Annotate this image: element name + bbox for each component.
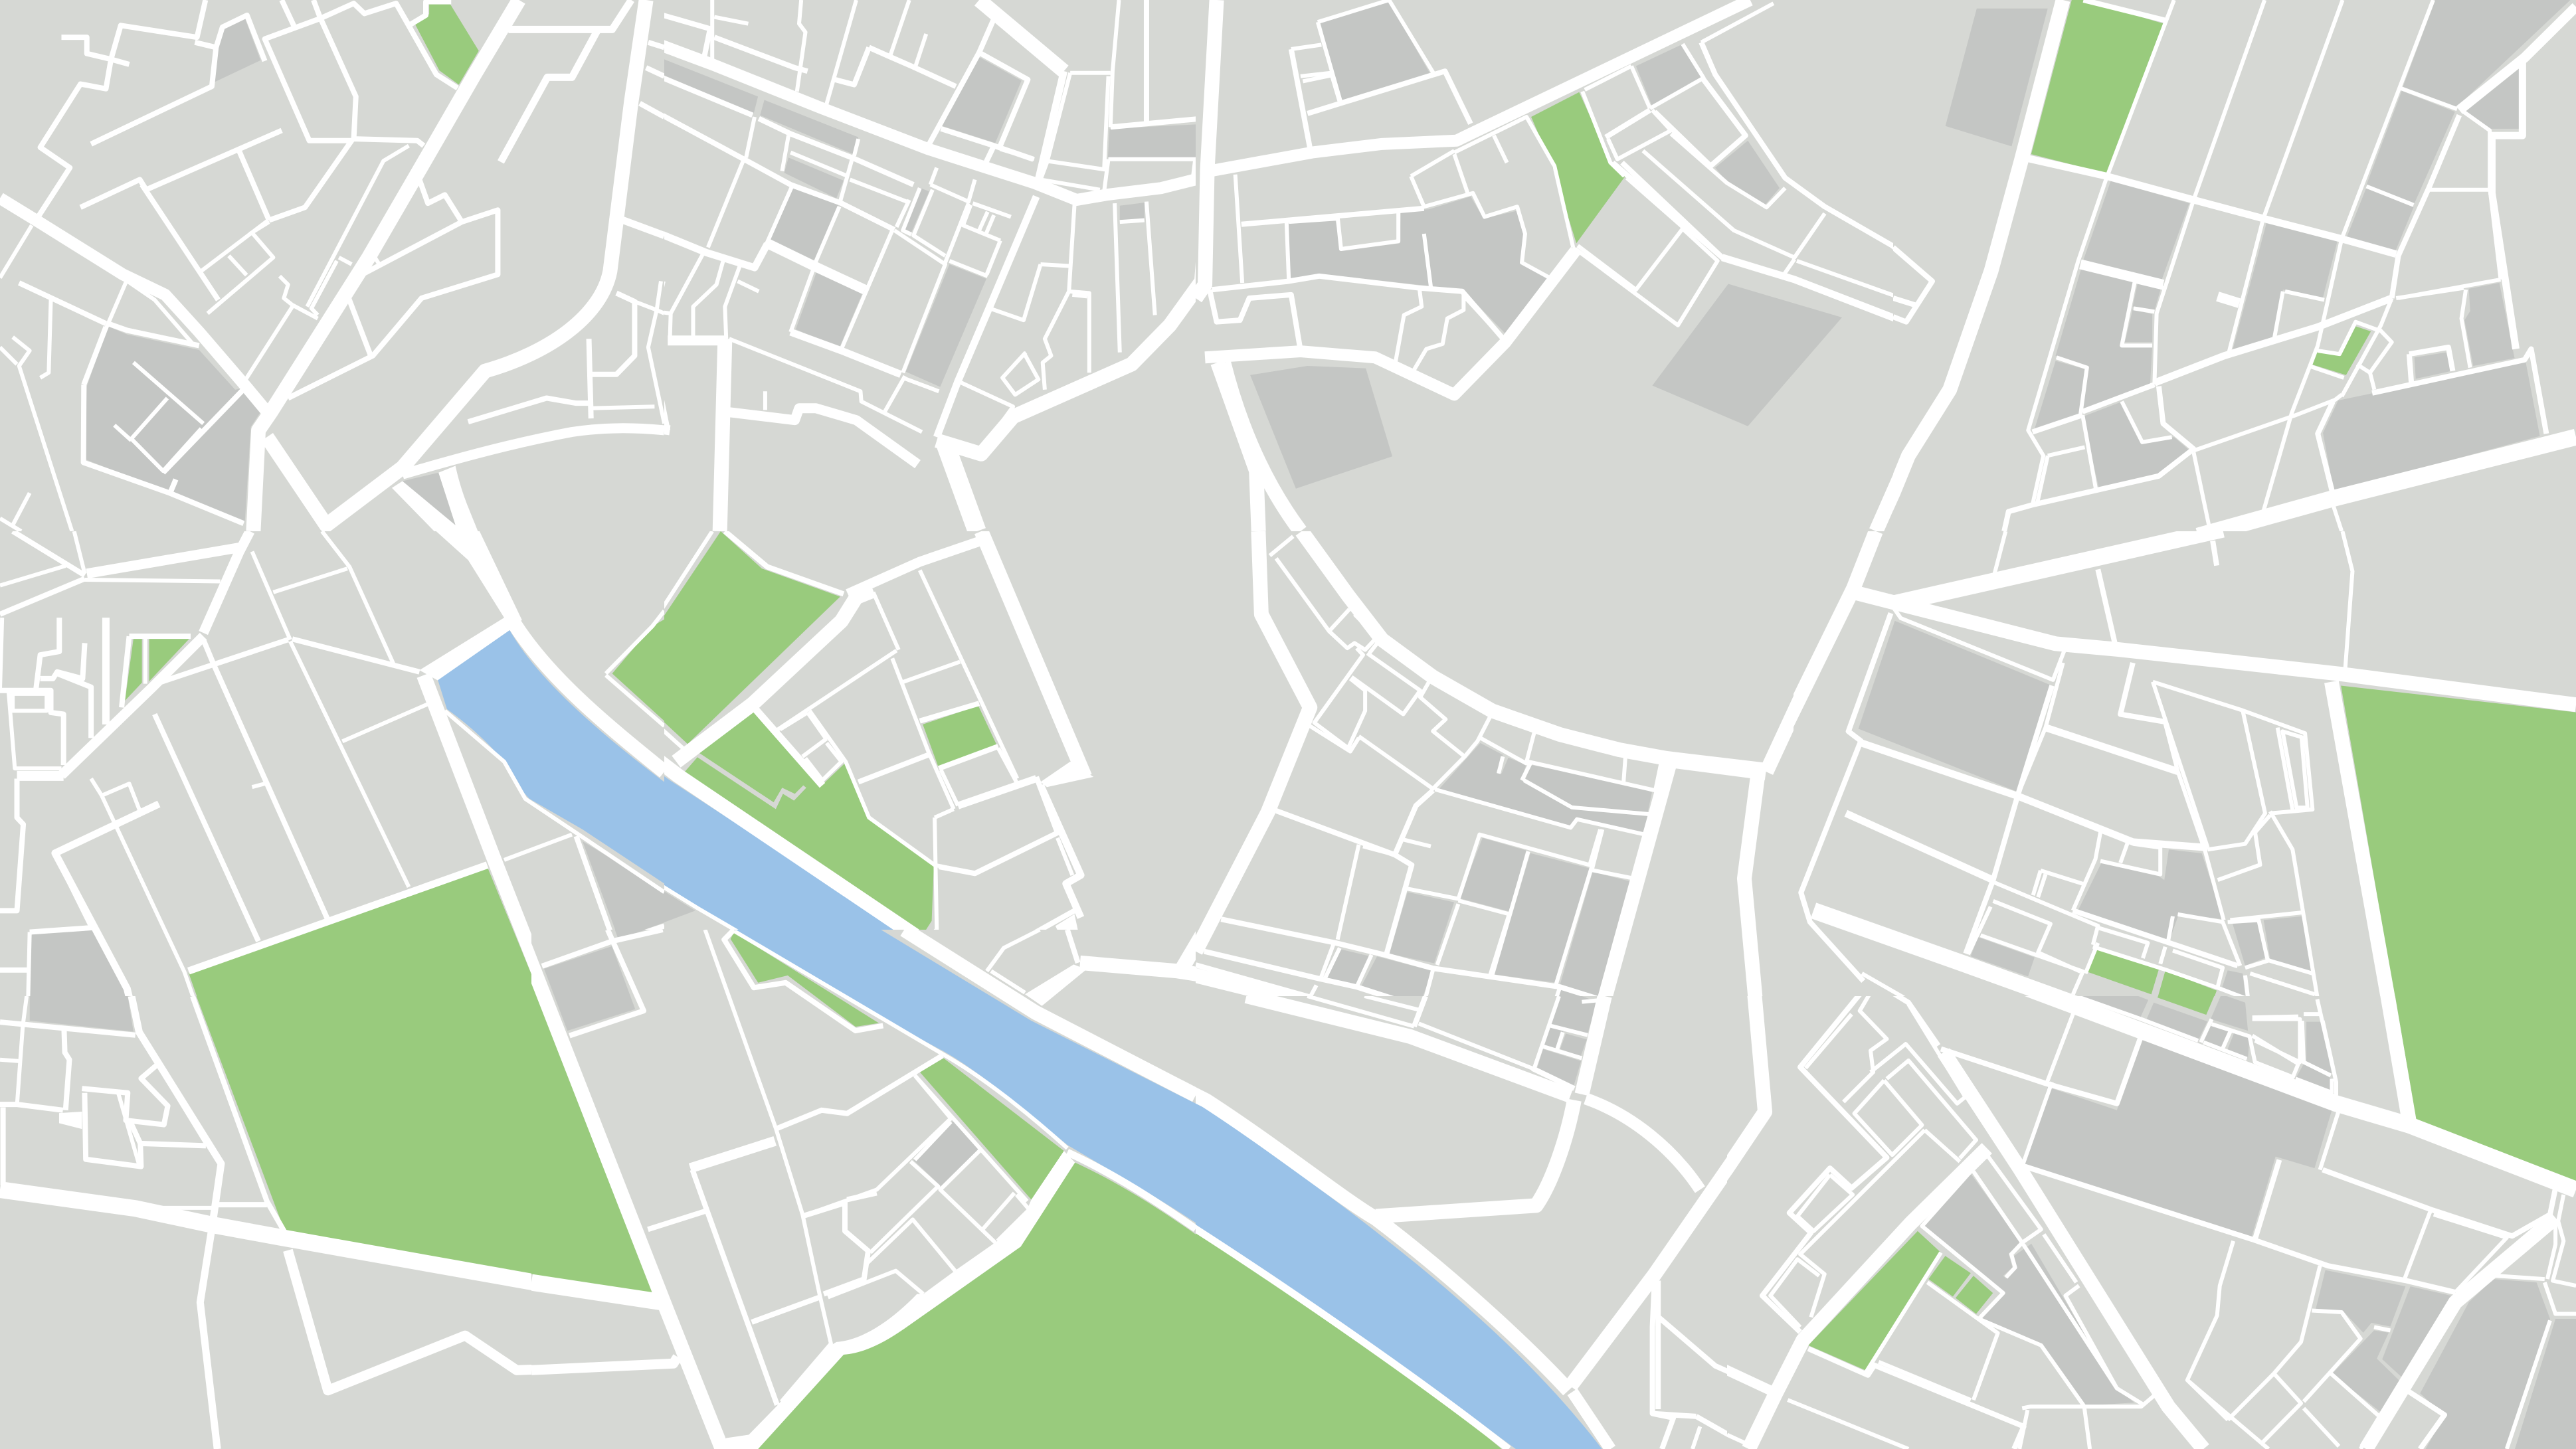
map section: north-east blocks with parks [1880,0,2576,536]
road junction wedge [392,466,478,531]
map section: east-central blocks [1196,531,1794,996]
riverside avenue [715,1151,1075,1449]
road junction wedge [419,529,522,680]
map section: south-west district with large park [0,996,531,1449]
map section: south-east district [1727,996,2576,1449]
map section: east blocks with large park [1794,531,2576,996]
map section: north-east central with park [1196,0,1926,531]
map section: west district with river head [0,531,664,996]
map section: north-central blocks [664,0,1196,531]
map section: south-central river bank [518,930,1205,1449]
map section: north-west district [0,0,664,531]
map section: central parks and river [664,531,1093,930]
map section: river bend and junction [1196,996,1727,1449]
